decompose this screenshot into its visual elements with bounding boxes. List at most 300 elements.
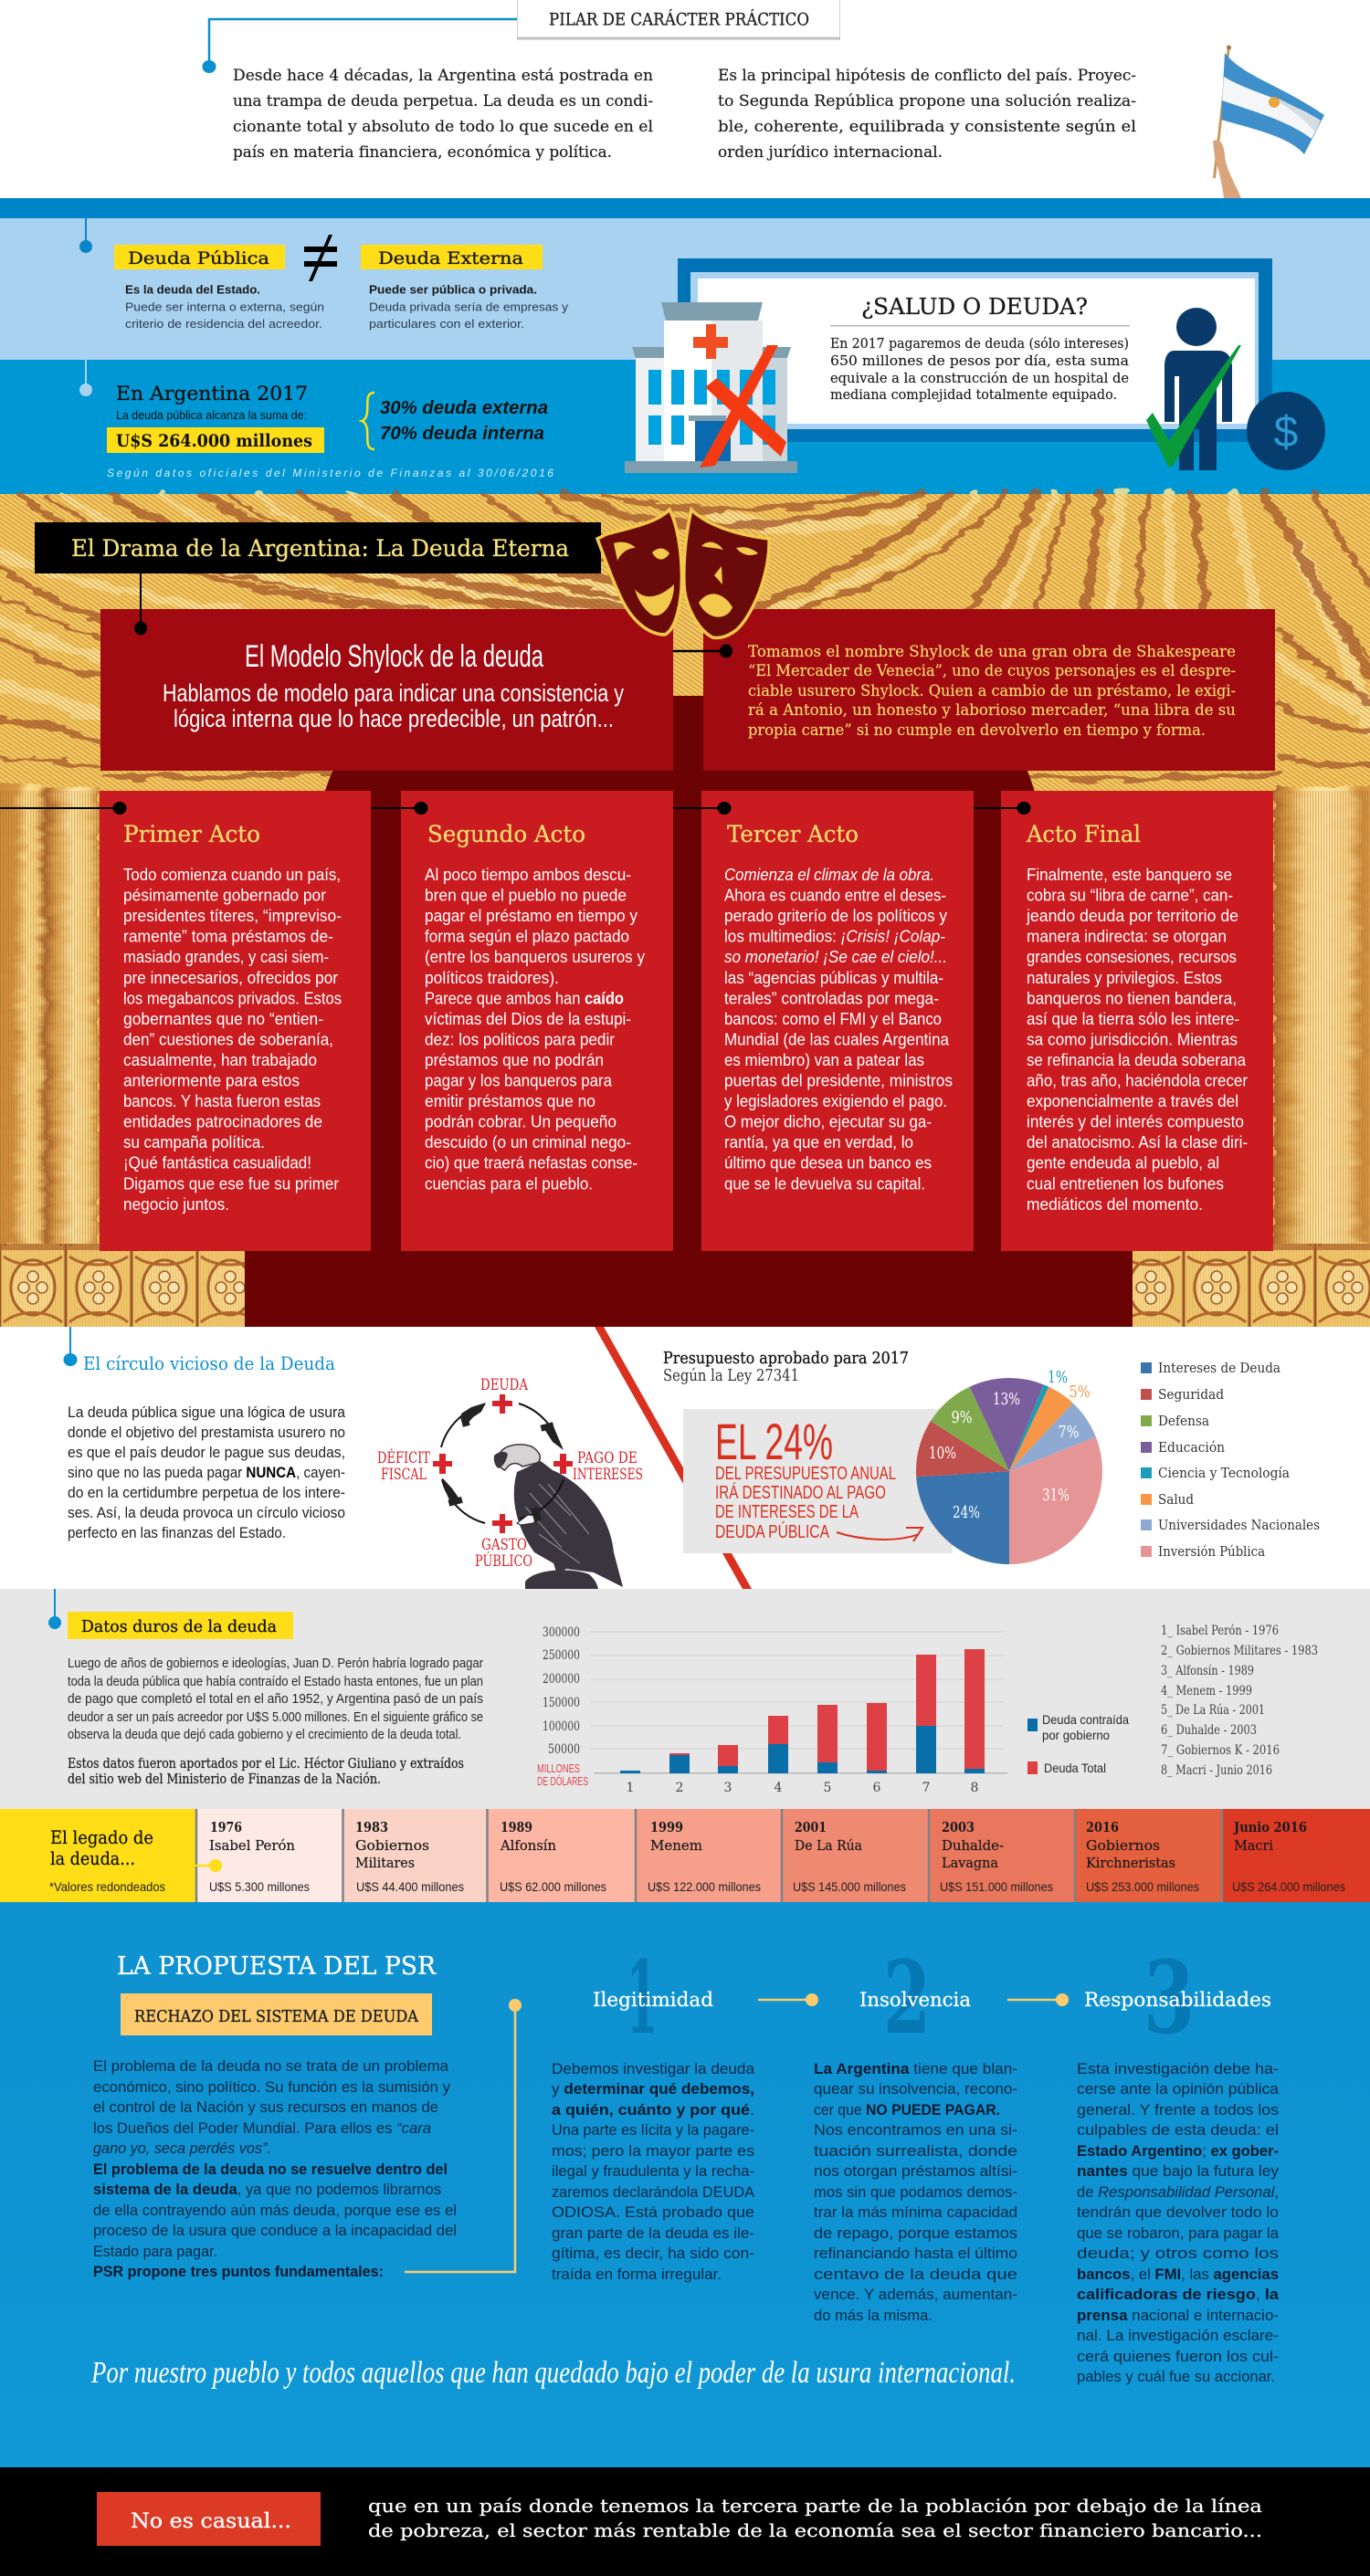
panel: salud o deuda monitor [678,258,1272,442]
icon: hand with Argentine flag [1213,46,1324,198]
panel: acto final: exponencialmente a través del [1027,1092,1238,1110]
list: gobiernos: 6_ Duhalde - 2003 [1161,1723,1257,1738]
cell: 1976 [196,1809,343,1902]
heading: salud o deuda: ¿SALUD O DEUDA? [861,294,1088,320]
cell: 2001 [782,1809,929,1902]
diagram: vulture debt cycle [377,1376,643,1589]
text: insolvencia: Nos encontramos en una si- [814,2121,1017,2139]
category labels: 5 [824,1781,831,1795]
icon: not equal sign [304,235,337,281]
arrow: to pie [837,1528,922,1541]
text: rechazo: económico, sino político. Su función es la sumisión y [93,2078,450,2096]
text: datos duros: observa la deuda que dejó cada gobierno y el crecimiento de la deuda total. [68,1727,461,1742]
text: fuente de datos [68,1757,464,1787]
brace [362,393,374,449]
cell: 1989: Alfonsín [500,1837,556,1854]
legend: presupuesto: Seguridad [1158,1386,1224,1403]
section: black footer [0,2467,1370,2576]
category labels: 3 [724,1781,732,1795]
axis unit [537,1761,588,1788]
top section background [0,0,1370,198]
heading: presupuesto [663,1349,909,1385]
panel: tercer acto: Comienza el climax de la obra. [724,866,934,884]
cell: 2016: Gobiernos [1086,1837,1160,1854]
text: responsabilidades: nantes que bajo la futura ley [1077,2162,1279,2180]
panel: segundo acto [401,791,673,1251]
labels: cycle stages: DEUDA [480,1376,529,1394]
text: ilegitimidad: gran parte de la deuda es ile- [552,2224,754,2242]
text: ilegitimidad: y determinar qué debemos, [552,2080,754,2098]
panel: segundo acto: bren que el pueblo no puede [425,886,627,904]
step 2: insolvencia: 2 [883,1939,931,2056]
pie labels: 24% [953,1503,980,1522]
text: ilegitimidad: zaremos declarándola DEUDA [552,2183,755,2201]
text: insolvencia: do más la misma. [814,2307,933,2324]
text: responsabilidades: culpables de esta deuda: el [1077,2121,1279,2139]
panel: primer acto: casualmente, han trabajado [123,1051,317,1069]
labels: cycle stages: FISCAL [381,1466,427,1484]
text: insolvencia: mos sin que podamos demos- [814,2183,1017,2201]
panel: primer acto: Todo comienza cuando un país, [123,866,341,884]
text: insolvencia: trar la más mínima capacidad [814,2203,1017,2221]
text: insolvencia [814,2060,1017,2324]
text: ilegitimidad: a quién, cuánto y por qué . [552,2101,754,2119]
labels: cycle stages: PÚBLICO [475,1551,532,1571]
text: rechazo: gano yo, seca perdés vos”. [93,2140,271,2157]
panel: acto final: gente endeuda al pueblo, al [1027,1154,1219,1172]
text: ilegitimidad: ODIOSA. Está probado que [552,2203,754,2221]
panel: tercer acto [701,791,974,1251]
text: definición deuda externa [369,283,569,331]
text: responsabilidades: nal. La investigación esclare- [1077,2327,1279,2344]
section: dark blue band [0,198,1370,218]
panel: tercer acto: O mejor dicho, ejecutar su ga- [724,1113,932,1131]
category labels: 1 [627,1781,634,1795]
title connector [203,19,517,73]
label: deuda pública [114,245,285,269]
panel: segundo acto: Segundo Acto [427,821,585,847]
labels: cycle stages: PAGO DE [577,1449,638,1467]
connector dot light [79,360,92,396]
heading: presupuesto: Presupuesto aprobado para 2017 [663,1349,909,1368]
text: ilegitimidad [552,2060,755,2283]
icon: person with check and dollar [1146,308,1325,470]
text: responsabilidades: pables y cuál fue su accionar. [1077,2368,1275,2385]
title: el drama de la Argentina [35,522,601,573]
text: responsabilidades: de Responsabilidad Personal, [1077,2183,1279,2201]
text: en Argentina 2017 [107,383,324,453]
list: gobiernos [1161,1624,1318,1778]
legend: bar chart: Deuda Total [1044,1761,1106,1775]
text block: hipótesis de conflicto: to Segunda República propone una solución realiza- [718,92,1136,110]
text: rechazo: PSR propone tres puntos fundamentales: [93,2263,384,2280]
axis labels: 200000 [543,1672,580,1687]
bar chart: deuda por gobierno [537,1625,1007,1795]
panel: primer acto: presidentes títeres, “impreviso- [123,907,342,925]
pie labels: 10% [929,1444,956,1463]
text: salud o deuda: mediana complejidad totalmente equipado. [830,388,1117,403]
text: círculo vicioso: La deuda pública sigue una lógica de usura [68,1404,346,1421]
panel: segundo acto: cio) que traerá nefastas conse- [425,1154,638,1172]
panel: tercer acto: los multimedios: ¡Crisis! ¡Colap- [724,928,945,946]
text: rechazo: Estado para pagar. [93,2243,217,2260]
heading: datos duros: Datos duros de la deuda [81,1617,277,1636]
panel: segundo acto: podrán cobrar. Un pequeño [425,1113,616,1131]
connector dot dark [79,218,92,253]
panel: el modelo Shylock: El Modelo Shylock de la deuda [245,639,543,674]
text block: deuda perpetua: Desde hace 4 décadas, la Argentina está postrada en [233,67,653,85]
heading: círculo vicioso: El círculo vicioso de la Deuda [83,1352,335,1374]
heading: presupuesto: Según la Ley 27341 [663,1366,799,1385]
panel: segundo acto: Parece que ambos han caído [425,989,624,1007]
axis labels: 150000 [543,1696,580,1710]
text: rechazo: El problema de la deuda no se resuelve dentro del [93,2161,448,2178]
category labels: 6 [873,1781,881,1795]
text: definición deuda externa: particulares con el exterior. [369,317,524,331]
text: insolvencia: vence. Y además, aumentan- [814,2286,1017,2303]
text: rechazo: de ella contrayendo aún más deuda, porque ese es el [93,2202,457,2219]
panel: el modelo Shylock: lógica interna que lo hace predecible, un patrón... [174,705,614,732]
text: definición deuda pública: criterio de residencia del acreedor. [125,317,322,331]
cell: 2016: U$S 253.000 millones [1086,1879,1199,1894]
icon: hospital crossed out [625,302,797,473]
panel: tercer acto: perado griterío de los políticos y [724,907,947,925]
panel: acto final: mediáticos del momento. [1027,1195,1203,1214]
legend: presupuesto [1141,1360,1320,1560]
panel: el modelo Shylock: Hablamos de modelo para indicar una consistencia y [163,679,624,707]
cell: 2016: 2016 [1086,1819,1119,1835]
text: responsabilidades: calificadoras de riesgo , la [1077,2286,1280,2303]
text: círculo vicioso: es que el país deudor le pague sus deudas, [68,1445,345,1461]
axis labels: 250000 [543,1648,580,1663]
icons: red plus signs [433,1394,573,1533]
text: salud o deuda: 650 millones de pesos por día, esta suma [830,354,1129,369]
maroon stage backdrop [245,696,1133,1327]
step 3: responsabilidades: Responsabilidades [1084,1989,1271,2011]
panel: segundo acto: (entre los banqueros usureros y [425,948,645,966]
panel: tercer acto: último que desea un banco es [724,1154,932,1172]
connector: title to model [134,573,147,636]
legend: presupuesto: Defensa [1158,1413,1209,1429]
cell: junio 2016: Macri [1234,1837,1273,1854]
panel: Shakespeare text: “El Mercader de Venecia”, uno de cuyos personajes es el despre- [748,662,1236,680]
panel: primer acto [100,791,371,1251]
panel: primer acto: bancos. Y hasta fueron estas [123,1092,321,1110]
labels: cycle stages: DÉFICIT [377,1448,430,1467]
text: responsabilidades: Estado Argentino; ex gober- [1077,2142,1279,2160]
icon: vulture [514,1461,623,1589]
list: gobiernos: 1_ Isabel Perón - 1976 [1161,1624,1279,1638]
panel: primer acto: negocio juntos. [123,1195,229,1214]
label: deuda externa: Deuda Externa [378,248,523,268]
heading: datos duros [48,1589,293,1639]
list: gobiernos: 4_ Menem - 1999 [1161,1684,1252,1698]
panel: tercer acto: so monetario! ¡Se cae el cielo!... [724,948,947,966]
step 1: ilegitimidad: Ilegitimidad [593,1989,713,2011]
label: deuda pública: Deuda Pública [128,248,269,268]
text: datos duros: toda la deuda pública que había contraído el Estado hasta entones, fue un plan [68,1674,483,1689]
panel: primer acto: Primer Acto [123,821,260,847]
panel: acto final: naturales y privilegios. Estos [1027,969,1222,987]
pie labels: 7% [1058,1423,1080,1442]
text: insolvencia: de repago, porque estamos [814,2224,1017,2242]
text: porcentajes de deuda [380,398,548,444]
callout: el 24%: DEL PRESUPUESTO ANUAL [715,1464,896,1484]
text: insolvencia: refinanciando hasta el último [814,2245,1017,2262]
cell: junio 2016 [1222,1809,1370,1902]
panel: tercer acto: que se le devuelva su capital. [724,1174,925,1193]
text: círculo vicioso: ses. Así, la deuda provoca un círculo vicioso [68,1505,345,1521]
panel: primer acto: ramente” toma préstamos de- [123,928,333,946]
cell: junio 2016: Junio 2016 [1232,1819,1307,1835]
text: definición deuda pública: Puede ser interna o externa, según [125,300,324,314]
panel: segundo acto: préstamos que no podrán [425,1051,604,1069]
list: gobiernos: 2_ Gobiernos Militares - 1983 [1161,1644,1318,1658]
step 3: responsabilidades [1084,1939,1271,2056]
panel: acto final: se refinancia la deuda soberana [1027,1051,1247,1069]
panel: Shakespeare text: propia carne” si no cumple en devolverlo en tiempo y forma. [748,721,1206,740]
pie labels: 13% [993,1390,1020,1409]
banner: rechazo del sistema de deuda [121,1993,432,2035]
text: definición deuda pública: Es la deuda del Estado. [125,283,260,296]
category labels: 4 [775,1781,783,1795]
text: insolvencia: La Argentina tiene que blan- [814,2060,1017,2077]
callout: el 24%: EL 24% [715,1413,833,1470]
panel: segundo acto: pagar y los banqueros para [425,1072,613,1090]
panel: Shakespeare text: rá a Antonio, un honesto y laborioso mercader, “una libra de su [748,701,1236,720]
text: fuente: Según datos oficiales del Ministerio de Finanzas al 30/06/2016 [107,467,553,479]
panel: primer acto: Digamos que ese fue su primer [123,1174,339,1193]
cell: 1999: Menem [650,1837,702,1854]
text: responsabilidades [1077,2060,1280,2385]
text block: deuda perpetua: una trampa de deuda perpetua. La deuda es un condi- [233,92,653,110]
arrow: 2 to 3 [1007,1993,1069,2006]
text: círculo vicioso: donde el objetivo del prestamista usurero no [68,1425,345,1441]
banner: rechazo del sistema de deuda: RECHAZO DEL SISTEMA DE DEUDA [134,2007,419,2026]
icons: pointing hands [442,1403,564,1525]
axis labels [543,1625,580,1757]
connector: yellow dot [195,1859,222,1872]
text: porcentajes de deuda: 30% deuda externa [380,398,548,418]
text: círculo vicioso: sino que no las pueda pagar NUNCA, cayen- [68,1465,345,1481]
cell: legado heading: El legado de [50,1826,153,1848]
step 2: insolvencia [859,1939,971,2056]
legend: presupuesto: Ciencia y Tecnología [1158,1465,1290,1481]
section: blue proposal background [0,1902,1370,2467]
title: pilar de carácter práctico: PILAR DE CARÁCTER PRÁCTICO [549,9,809,29]
red diagonal stripe [595,1327,752,1589]
text: ilegitimidad: gítima, es decir, ha sido con- [552,2245,754,2262]
cell: legado heading: la deuda... [50,1847,135,1869]
text: insolvencia: quear su insolvencia, recono- [814,2080,1017,2098]
pie chart: presupuesto [916,1368,1102,1564]
callout: no es casual: No es casual... [131,2510,291,2533]
text: responsabilidades: prensa nacional e internacio- [1077,2307,1279,2324]
text: salud o deuda: equivale a la construcción de un hospital de [830,372,1129,386]
category labels: 7 [922,1781,930,1795]
legend: bar chart: por gobierno [1042,1729,1110,1742]
panel: Shakespeare text: ciable usurero Shylock. Quien a cambio de un préstamo, le exigi- [748,682,1236,700]
section: gray hard data [0,1589,1370,1809]
callout: el 24%: IRÁ DESTINADO AL PAGO [715,1482,886,1503]
cell: 1976: Isabel Perón [209,1837,295,1854]
text: responsabilidades: bancos, el FMI, las agencias [1077,2266,1279,2283]
script dedication: Por nuestro pueblo y todos aquellos que han quedado bajo el poder de la usura internacional. [90,2356,1016,2390]
panel: primer acto: pre innecesarios, ofrecidos por [123,969,338,987]
cell: 1983: U$S 44.400 millones [356,1879,464,1894]
cell: 2001: De La Rúa [795,1837,862,1854]
text: footer statement: que en un país donde tenemos la tercera parte de la población por debajo de la línea [368,2495,1262,2517]
labels: cycle stages: GASTO [481,1536,527,1554]
cell: 1999: U$S 122.000 millones [648,1879,761,1894]
list: gobiernos: 8_ Macri - Junio 2016 [1161,1763,1272,1778]
icon: theatre masks [597,510,769,637]
label: deuda externa [361,245,543,269]
panel: segundo acto: forma según el plazo pactado [425,928,629,946]
icon: person with check and dollar: $ [1274,408,1298,457]
cell: 1976: U$S 5.300 millones [209,1879,310,1894]
pie labels [929,1368,1091,1522]
text: responsabilidades: cerse ante la opinión pública [1077,2080,1280,2098]
text: fuente de datos: del sitio web del Ministerio de Finanzas de la Nación. [68,1772,381,1787]
panel: acto final: Finalmente, este banquero se [1027,866,1232,884]
panel: primer acto: entidades patrocinadores de [123,1113,322,1131]
text: responsabilidades: general. Y frente a todos los [1077,2101,1279,2119]
labels: cycle stages [377,1376,643,1571]
bars [669,1649,985,1771]
section: white debt circle [0,1327,1370,1589]
text: círculo vicioso: do en la certidumbre perpetua de los intere- [68,1485,345,1501]
panel: tercer acto: es miembro) van a patear las [724,1051,924,1069]
cell: 2016 [1075,1809,1222,1902]
step 3: responsabilidades: 3 [1143,1939,1195,2056]
cell: 1983: Gobiernos [355,1837,429,1854]
panel: segundo acto: pagar el préstamo en tiempo y [425,907,638,925]
panel: primer acto: masiado grandes, y casi siem- [123,948,329,966]
text: rechazo: sistema de la deuda, ya que no podemos librarnos [93,2181,441,2198]
cell: 1983 [343,1809,488,1902]
pie labels: 5% [1069,1383,1091,1402]
panel: primer acto: su campaña política. [123,1133,265,1151]
heading: la propuesta del PSR: LA PROPUESTA DEL PSR [117,1952,437,1981]
panel: theatre curtain background [0,494,1370,1327]
text: insolvencia: tuación surrealista, donde [814,2142,1017,2160]
text: rechazo [93,2057,457,2280]
panel: acto final: cobra su “libra de carne”, can- [1027,886,1233,904]
text: insolvencia: cer que NO PUEDE PAGAR. [814,2101,1000,2119]
text block: hipótesis de conflicto: ble, coherente, equilibrada y consistente según el [718,118,1136,136]
labels: cycle stages: INTERESES [573,1466,643,1484]
text: datos duros: de pago que completó el total en el año 1952, y Argentina pasó de un país [68,1691,483,1707]
pie labels: 9% [952,1408,972,1427]
text: en Argentina 2017: La deuda pública alcanza la suma de: [116,408,307,422]
text: en Argentina 2017: En Argentina 2017 [116,383,308,405]
text: insolvencia: nos otorgan préstamos altísi- [814,2162,1017,2180]
text: responsabilidades: tendrán que devolver todo lo [1077,2203,1279,2221]
cell: 2003: Lavagna [942,1855,998,1871]
text: círculo vicioso [68,1404,346,1541]
text: ilegitimidad: mos; pero la mayor parte es [552,2142,754,2160]
axis unit: DE DÓLARES [537,1774,588,1788]
panel: acto final: así que la tierra sólo les intere- [1027,1010,1239,1028]
pie labels: 31% [1042,1486,1070,1505]
pie labels: 1% [1048,1368,1068,1387]
cell: 2016: Kirchneristas [1086,1855,1175,1871]
legend: presupuesto: Universidades Nacionales [1158,1517,1320,1533]
cell: 1983: 1983 [355,1819,388,1835]
panel: tercer acto: terales” controladas por mega- [724,989,939,1007]
panel: tercer acto: rantía, ya que en verdad, lo [724,1133,913,1151]
cell: 1989: 1989 [501,1819,532,1835]
text: datos duros [68,1656,483,1742]
text block: deuda perpetua: cionante total y absoluto de todo lo que sucede en el [233,118,653,136]
cell: junio 2016: U$S 264.000 millones [1232,1879,1345,1894]
callout: el 24%: DEUDA PÚBLICA [715,1521,830,1542]
text: ilegitimidad: Una parte es lícita y la pagare- [552,2121,754,2139]
panel: segundo acto: políticos traidores). [425,969,559,987]
axis labels: 50000 [548,1742,580,1757]
panel: acto final: manera indirecta: se otorgan [1027,928,1227,946]
text: rechazo: el control de la Nación y sus recursos en manos de [93,2098,438,2116]
cell: 1989: U$S 62.000 millones [500,1879,606,1894]
panel: segundo acto: dez: los politicos para pedir [425,1030,615,1048]
category labels [627,1781,978,1795]
panel: segundo acto: emitir préstamos que no [425,1092,595,1110]
panel: acto final: Acto Final [1026,821,1141,847]
text: ilegitimidad: ilegal y fraudulenta y la recha- [552,2162,754,2180]
panel: tercer acto: Tercer Acto [727,821,859,847]
cell: 2003: U$S 151.000 millones [940,1879,1053,1894]
panel: Shakespeare text [703,609,1275,771]
text: rechazo: El problema de la deuda no se trata de un problema [93,2057,449,2075]
cell: 2003: Duhalde- [942,1837,1004,1854]
text: círculo vicioso: perfecto en las finanzas del Estado. [68,1525,286,1541]
legend: bar chart [1028,1713,1129,1775]
panel: acto final: del anatocismo. Así la clase diri- [1027,1133,1248,1151]
text block: hipótesis de conflicto: orden jurídico internacional. [718,143,943,162]
cell: 1989 [488,1809,636,1902]
panel: Shakespeare text: Tomamos el nombre Shylock de una gran obra de Shakespeare [748,643,1236,661]
cell: 2001: 2001 [795,1819,827,1835]
panel: acto final: grandes consesiones, recursos [1027,948,1237,966]
text: definición deuda externa: Deuda privada sería de empresas y [369,300,569,314]
text: responsabilidades: Esta investigación debe ha- [1077,2060,1279,2077]
text: porcentajes de deuda: 70% deuda interna [380,424,544,444]
panel: tercer acto: Ahora es cuando entre el deses- [724,886,946,904]
timeline: el legado de la deuda [0,1809,1370,1902]
text: ilegitimidad: traída en forma irregular. [552,2266,722,2283]
step 1: ilegitimidad: 1 [627,1939,658,2056]
cell: 2003 [929,1809,1075,1902]
cell: 1999 [636,1809,782,1902]
panel: primer acto: anteriormente para estos [123,1072,300,1090]
callout: el 24% [683,1409,953,1553]
text: en Argentina 2017: U$S 264.000 millones [116,431,312,451]
callout: no es casual [97,2492,321,2546]
legend: presupuesto: Intereses de Deuda [1158,1360,1280,1376]
panel: acto final: jeando deuda por territorio de [1026,907,1238,925]
connectors: act dots [0,802,1030,815]
text: fuente de datos: Estos datos fueron aportados por el Lic. Héctor Giuliano y extraídos [68,1757,464,1772]
cell: legado heading [0,1809,196,1902]
text: responsabilidades: cerá quienes fueron los cul- [1077,2348,1279,2365]
cell: 2003: 2003 [942,1819,975,1835]
text block: deuda perpetua: país en materia financiera, económica y política. [233,143,612,162]
category labels: 8 [971,1781,978,1795]
panel: primer acto: den” cuestiones de soberanía, [123,1030,333,1048]
text: salud o deuda: En 2017 pagaremos de deuda (sólo intereses) [830,337,1129,352]
axis unit: MILLONES [537,1761,580,1775]
